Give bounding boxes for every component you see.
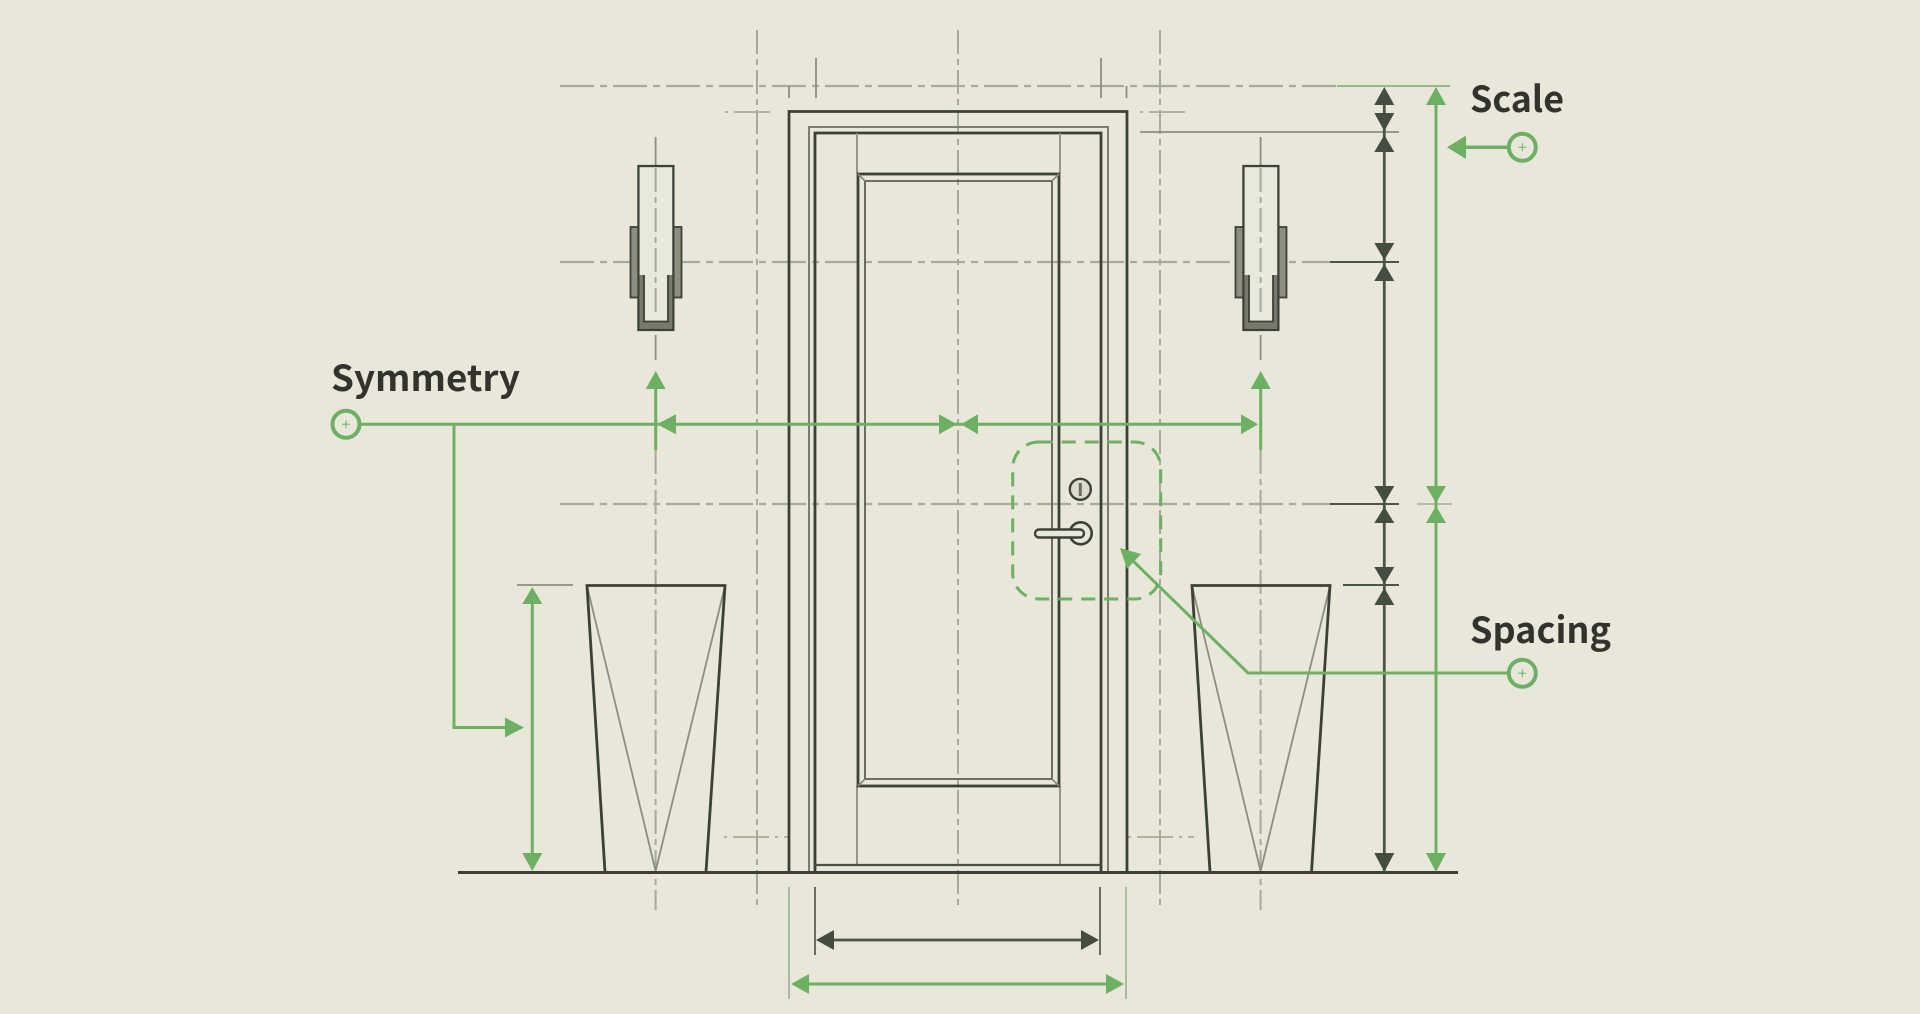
right wall lamp bbox=[1236, 166, 1286, 330]
left planter bbox=[587, 586, 725, 872]
green overall height dimension bbox=[1337, 86, 1450, 872]
spacing marker and leader bbox=[1120, 548, 1536, 687]
left planter height dimension bbox=[517, 585, 573, 871]
left wall lamp bbox=[630, 166, 682, 330]
symmetry marker and leader lines bbox=[332, 371, 1271, 738]
door panel bbox=[858, 174, 1059, 786]
construction centre lines bbox=[560, 30, 1452, 910]
scale label: Scale bbox=[1470, 71, 1564, 123]
scale marker and arrow bbox=[1447, 134, 1536, 161]
green frame width dimension bbox=[789, 887, 1126, 999]
right planter bbox=[1192, 586, 1330, 872]
dark door width dimension bbox=[815, 887, 1100, 955]
symmetry label: Symmetry bbox=[331, 350, 520, 402]
dark vertical dimension chain bbox=[1330, 87, 1399, 872]
ground line bbox=[458, 871, 1458, 874]
door hardware: lock and lever handle bbox=[1035, 479, 1092, 544]
door frame and door leaf bbox=[789, 112, 1127, 872]
highlight: dashed box around hardware bbox=[1013, 442, 1161, 599]
spacing label: Spacing bbox=[1470, 602, 1611, 654]
